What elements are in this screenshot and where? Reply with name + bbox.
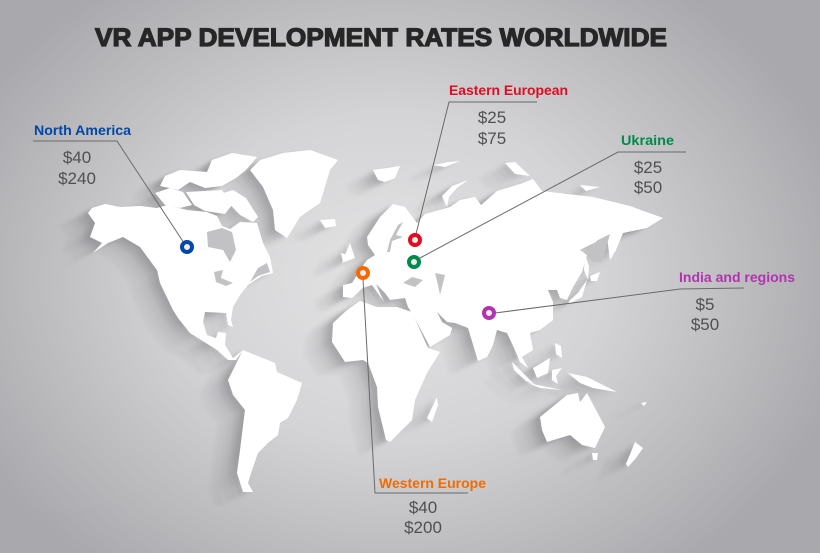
leader line [416,102,537,234]
pin [484,308,494,318]
leader line [363,279,468,493]
callout: North America: $240 [58,169,96,188]
callout: Ukraine: $50 [634,178,662,197]
rates: $40 [63,148,91,167]
callout: Western Europe: $200 [404,518,442,537]
rates: $5 [696,295,714,314]
title: VR APP DEVELOPMENT RATES WORLDWIDE [95,24,667,52]
label: North America [34,122,131,138]
leader line [420,152,686,258]
pin [410,235,420,245]
callout: North America [33,122,192,252]
pin [358,268,368,278]
label: India and regions [679,269,795,285]
rates: $25 [478,108,506,127]
world map [60,150,663,506]
callout: Eastern European: $75 [478,129,506,148]
map cast shadow [60,152,658,506]
continents [88,150,663,492]
callout: Eastern European [410,82,568,245]
pin [182,242,192,252]
leader line [33,141,184,243]
rates: $40 [409,498,437,517]
label: Ukraine [621,132,674,148]
label: Eastern European [449,82,568,98]
label: Western Europe [379,475,486,491]
leader line [495,288,744,313]
pin [409,257,419,267]
inland seas [207,222,610,295]
callout: India and regions: $50 [691,315,719,334]
callout: Western Europe [358,268,486,537]
rates: $25 [634,158,662,177]
callout: Ukraine [409,132,686,267]
callout: India and regions [484,269,795,334]
